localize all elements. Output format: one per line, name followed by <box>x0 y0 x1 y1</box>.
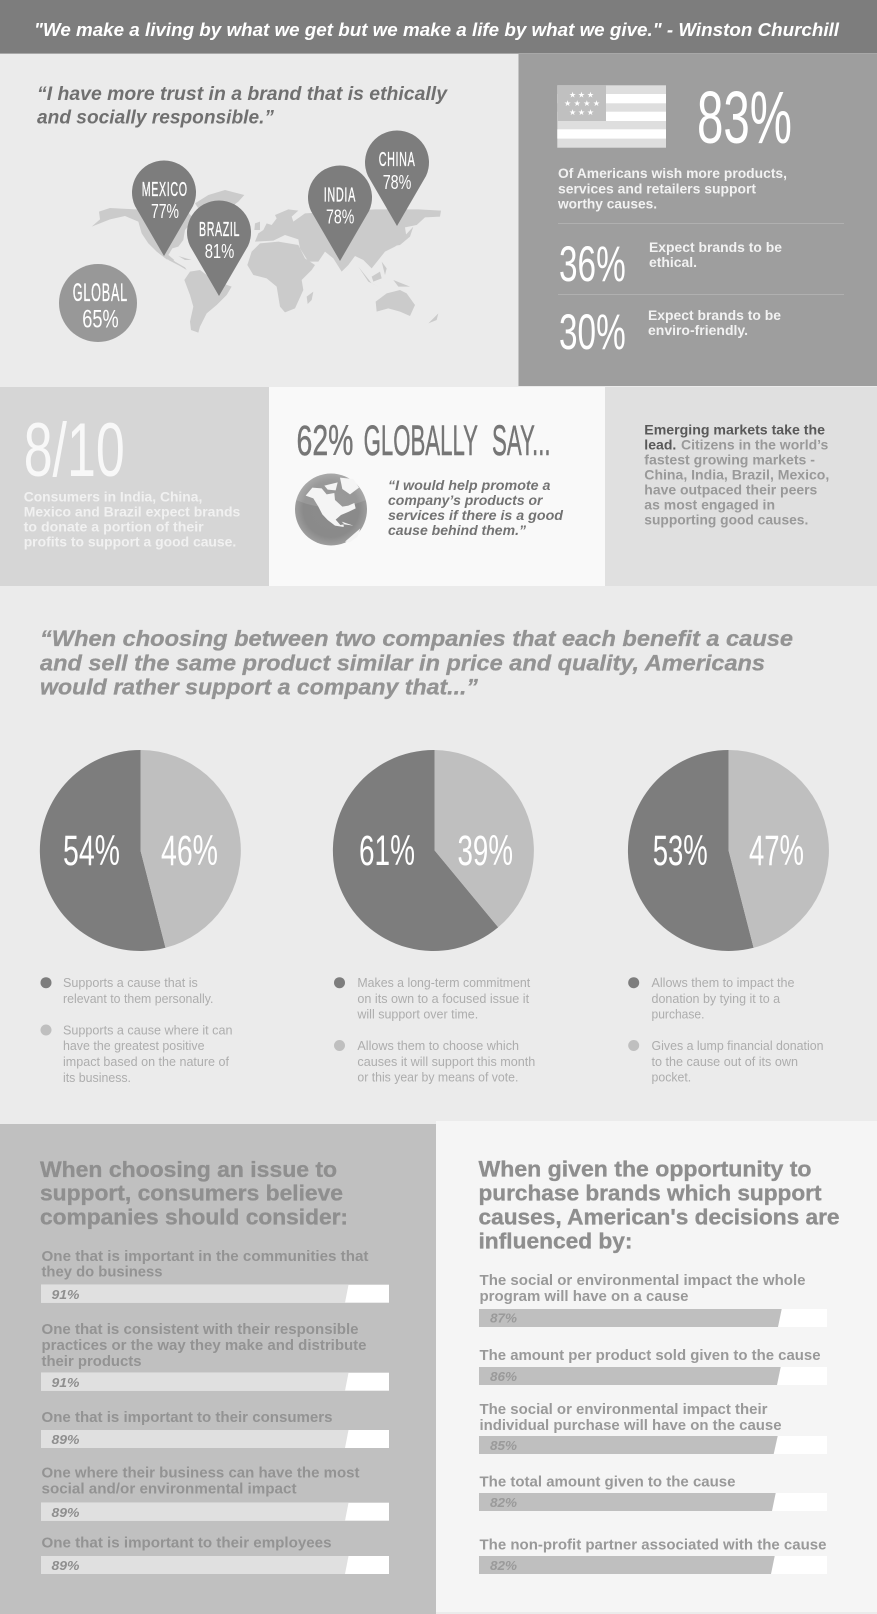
panel: 62% globally say <box>269 387 605 586</box>
bar item: whole program 87%: 87% <box>490 1311 517 1326</box>
heading: choosing an issue: When choosing an issue to <box>40 1157 337 1182</box>
text: emerging markets: Emerging markets take the <box>644 421 825 437</box>
legend: pie 3: pocket. <box>652 1070 691 1084</box>
heading: purchase decisions: purchase brands which support <box>478 1181 822 1206</box>
bar item: impact 89% <box>41 1466 389 1521</box>
quote: trust in brand: “I have more trust in a brand that is ethically <box>37 83 448 105</box>
quote: help promote: cause behind them.” <box>388 522 526 538</box>
bar item: individual purchase 85%: The social or environmental impact their <box>480 1402 768 1418</box>
text: Americans wish <box>557 165 787 212</box>
bar item: whole program 87%: The social or environmental impact the whole <box>480 1273 806 1289</box>
legend: pie 2: or this year by means of vote. <box>357 1070 518 1084</box>
pin: Mexico 77% <box>132 160 196 256</box>
text: emerging markets <box>644 421 829 527</box>
pin: India 78%: 78% <box>326 205 354 228</box>
heading: purchase decisions <box>478 1157 840 1254</box>
legend: pie 2: will support over time. <box>356 1006 478 1022</box>
bar item: impact 89%: 89% <box>52 1505 80 1520</box>
text: expect enviro-friendly: enviro-friendly. <box>648 322 748 338</box>
bar item: employees 89% <box>41 1536 389 1574</box>
bar item: consistent 91%: practices or the way they make and distribute <box>42 1338 366 1354</box>
quote: help promote: “I would help promote a <box>388 477 551 493</box>
panel: American statistics <box>518 54 877 386</box>
heading: when choosing between two companies <box>40 626 793 700</box>
marker: global 65% <box>59 264 137 342</box>
bar item: consistent 91% <box>41 1322 389 1391</box>
bar item: individual purchase 85%: 85% <box>490 1438 517 1453</box>
text: consumers expect: Consumers in India, China, <box>24 489 202 505</box>
icon: American flag: ★★★★ <box>564 99 600 108</box>
pie chart: 61% / 39%: 61% <box>359 827 415 875</box>
text: emerging markets: have outpaced their peers <box>644 481 818 497</box>
legend: pie 1: impact based on the nature of <box>63 1054 229 1069</box>
marker: global 65%: 65% <box>82 305 119 333</box>
legend: pie 1: its business. <box>63 1070 131 1085</box>
pin: China 78% <box>365 130 429 226</box>
pin: Brazil 81%: 81% <box>205 240 234 263</box>
heading: 62% globally say <box>296 417 551 465</box>
bar item: non-profit partner 82% <box>479 1538 827 1574</box>
bar item: amount per product 86%: 86% <box>490 1369 517 1384</box>
legend: pie 3: Allows them to impact the <box>652 975 794 990</box>
icon: American flag: ★★★ <box>569 108 594 117</box>
legend: pie 1: Supports a cause where it can <box>63 1023 232 1038</box>
pie chart: 53% / 47% <box>628 750 829 951</box>
heading: choosing an issue: companies should consider: <box>40 1205 348 1230</box>
text: consumers expect: Mexico and Brazil expect brands <box>24 504 241 520</box>
legend: pie 3: Gives a lump financial donation <box>652 1038 824 1053</box>
text: emerging markets: lead. <box>644 436 676 452</box>
stat: 36%: 36% <box>559 236 626 292</box>
pie chart: 61% / 39% <box>333 750 534 951</box>
legend: pie 2: on its own to a focused issue it <box>357 991 529 1006</box>
world map <box>92 190 441 333</box>
bar item: consistent 91%: 91% <box>52 1375 80 1390</box>
bar item: non-profit partner 82%: 82% <box>490 1558 517 1573</box>
bar item: total amount 82%: 82% <box>490 1495 517 1510</box>
legend: pie 2 <box>334 975 535 1084</box>
heading: purchase decisions: causes, American's decisions are <box>478 1205 840 1230</box>
pin: Brazil 81% <box>187 200 251 296</box>
quote: help promote <box>388 477 563 538</box>
legend: pie 3: purchase. <box>652 1006 704 1022</box>
heading: when choosing between two companies: “When choosing between two companies that each benefit a cause <box>40 626 793 651</box>
legend: pie 1: Supports a cause that is <box>63 975 198 990</box>
text: emerging markets: fastest growing markets - <box>644 451 815 467</box>
bar item: non-profit partner 82%: The non-profit partner associated with the cause <box>480 1538 826 1554</box>
header banner with quote <box>0 0 877 54</box>
panel: emerging markets <box>605 387 877 586</box>
heading: when choosing between two companies: and sell the same product similar in price and quality, Americans <box>40 650 765 676</box>
bar item: communities 91%: One that is important in the communities that <box>42 1249 369 1265</box>
panel: brand trust world map <box>0 54 519 387</box>
legend: pie 1: relevant to them personally. <box>63 991 213 1006</box>
text: Americans wish: Of Americans wish more products, <box>558 165 787 181</box>
legend: pie 1 <box>40 975 232 1085</box>
bar item: communities 91%: they do business <box>42 1265 162 1281</box>
text: consumers expect: to donate a portion of their <box>24 519 204 535</box>
bar item: communities 91%: 91% <box>52 1287 80 1302</box>
pie chart: 53% / 47%: 47% <box>749 827 804 875</box>
stat: 30%: 30% <box>559 304 626 360</box>
heading: purchase decisions: When given the opportunity to <box>478 1157 812 1182</box>
bar item: consistent 91%: their products <box>42 1354 142 1370</box>
bar item: consistent 91%: One that is consistent with their responsible <box>42 1322 358 1338</box>
bar item: employees 89%: 89% <box>52 1558 80 1573</box>
bar item: impact 89%: One where their business can have the most <box>42 1466 360 1482</box>
legend: pie 2: Allows them to choose which <box>357 1038 519 1053</box>
quote: help promote: company’s products or <box>388 492 544 508</box>
heading: 62% globally say: SAY... <box>492 417 551 465</box>
pin: China 78%: 78% <box>383 171 411 194</box>
pin: Mexico 77%: 77% <box>151 200 179 223</box>
text: emerging markets: China, India, Brazil, Mexico, <box>644 466 829 482</box>
quote: trust in brand: and socially responsible.” <box>37 106 274 128</box>
pin: Mexico 77%: MEXICO <box>142 178 188 201</box>
text: consumers expect <box>24 489 241 550</box>
icon: American flag <box>557 85 666 148</box>
legend: pie 1: have the greatest positive <box>63 1038 204 1053</box>
pin: Brazil 81%: BRAZIL <box>199 218 240 241</box>
text: expect ethical: ethical. <box>649 254 697 270</box>
pie chart: 53% / 47%: 53% <box>653 827 708 875</box>
pie chart: 54% / 46%: 54% <box>63 827 120 875</box>
bar item: amount per product 86%: The amount per product sold given to the cause <box>480 1348 820 1364</box>
pin: India 78%: INDIA <box>324 184 356 207</box>
header banner with quote: "We make a living by what we get but we make a life by what we give." - Winston Churchill <box>34 20 840 40</box>
bar item: consumers 89%: 89% <box>52 1432 80 1447</box>
icon: globe <box>295 472 367 546</box>
heading: 62% globally say: GLOBALLY <box>364 417 478 465</box>
heading: purchase decisions: influenced by: <box>478 1229 632 1254</box>
bar item: consumers 89%: One that is important to their consumers <box>42 1410 332 1426</box>
bar item: total amount 82%: The total amount given to the cause <box>480 1475 736 1491</box>
bar item: consumers 89% <box>41 1410 389 1448</box>
text: expect ethical: Expect brands to be <box>649 239 782 255</box>
stat: 83%: 83% <box>697 76 792 159</box>
bar item: whole program 87%: program will have on a cause <box>480 1289 688 1305</box>
pie chart: 61% / 39%: 39% <box>458 827 513 875</box>
text: expect ethical <box>649 239 782 270</box>
text: emerging markets: as most engaged in <box>644 496 775 512</box>
text: expect enviro-friendly <box>648 307 781 338</box>
bar item: impact 89%: social and/or environmental impact <box>42 1482 297 1498</box>
pin: China 78%: CHINA <box>379 148 415 171</box>
quote: trust in brand <box>37 83 448 128</box>
text: Americans wish: services and retailers support <box>558 180 756 196</box>
bar item: total amount 82% <box>479 1475 827 1511</box>
quote: help promote: services if there is a good <box>388 507 563 523</box>
pin: India 78% <box>308 165 372 261</box>
text: emerging markets: Citizens in the world’s <box>681 436 829 452</box>
panel: purchase decisions <box>436 1121 877 1612</box>
icon: American flag: ★★★ <box>569 90 594 100</box>
bar item: individual purchase 85% <box>479 1402 827 1454</box>
legend: pie 3: to the cause out of its own <box>652 1054 798 1069</box>
bar item: amount per product 86% <box>479 1348 827 1385</box>
heading: when choosing between two companies: would rather support a company that...” <box>40 675 479 700</box>
text: expect enviro-friendly: Expect brands to be <box>648 307 781 323</box>
pie chart: 54% / 46%: 46% <box>161 827 218 875</box>
heading: choosing an issue: support, consumers believe <box>40 1181 343 1206</box>
bar item: employees 89%: One that is important to their employees <box>42 1536 332 1552</box>
legend: pie 3: donation by tying it to a <box>652 991 781 1006</box>
pie chart: 54% / 46% <box>40 750 241 951</box>
legend: pie 2: Makes a long-term commitment <box>357 975 531 990</box>
stat: 8/10: 8/10 <box>24 408 125 493</box>
bar item: whole program 87% <box>479 1273 827 1327</box>
legend: pie 3 <box>628 975 824 1084</box>
bar item: individual purchase 85%: individual purchase will have on the cause <box>480 1418 782 1434</box>
bar item: communities 91% <box>41 1249 389 1303</box>
text: emerging markets: supporting good causes. <box>644 511 808 527</box>
panel: choosing an issue <box>0 1124 436 1614</box>
text: consumers expect: profits to support a good cause. <box>24 534 236 550</box>
legend: pie 2: causes it will support this month <box>357 1054 535 1069</box>
text: Americans wish: worthy causes. <box>557 196 657 212</box>
heading: 62% globally say: 62% <box>296 417 354 465</box>
heading: choosing an issue <box>40 1157 348 1230</box>
panel: 8/10 consumers <box>0 387 269 586</box>
marker: global 65%: GLOBAL <box>73 279 128 307</box>
